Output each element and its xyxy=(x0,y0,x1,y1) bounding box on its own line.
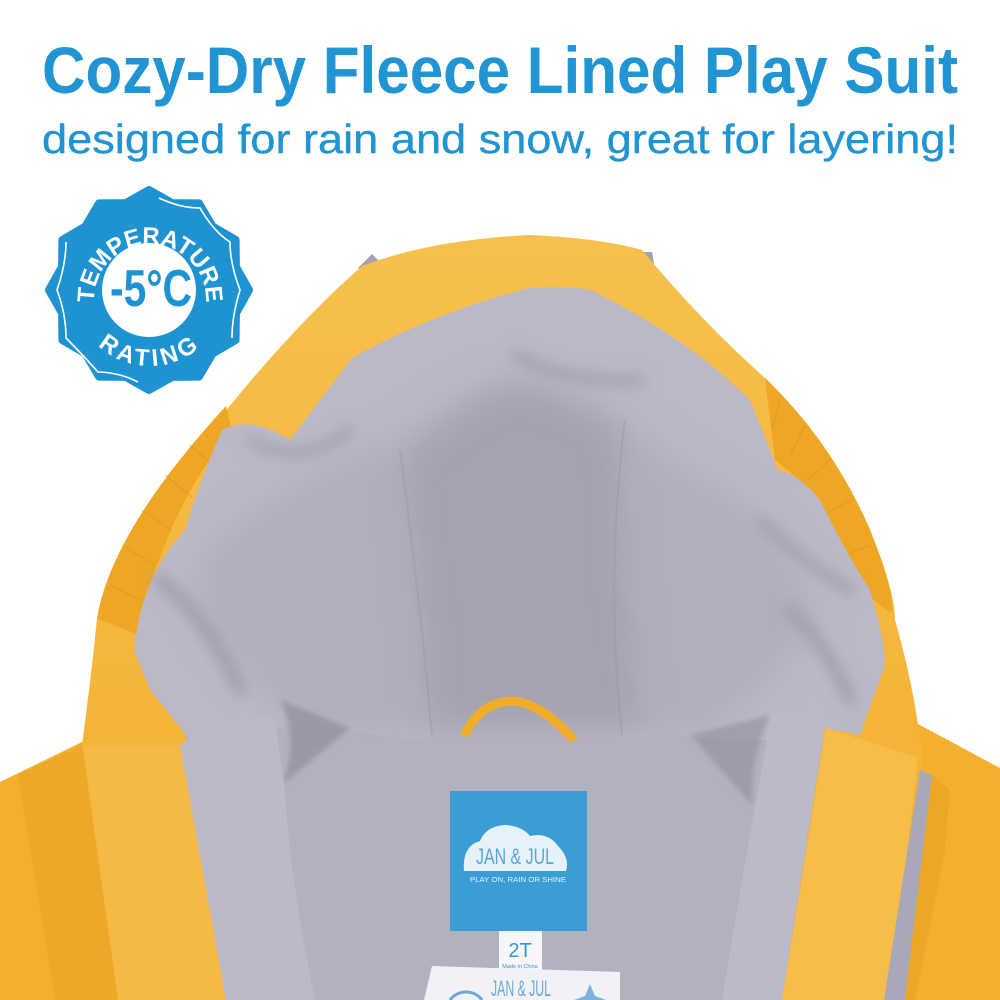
right collar fleece xyxy=(722,712,825,1000)
back seam lines xyxy=(400,420,625,735)
badge: temperature rating xyxy=(45,186,253,394)
hood elastic right xyxy=(765,378,892,614)
fleece interior shadow xyxy=(405,385,640,725)
star icon xyxy=(574,984,606,1000)
woven label xyxy=(450,791,587,931)
fleece mid tone xyxy=(200,380,815,735)
logo cloud xyxy=(464,825,567,871)
grey hood tabs xyxy=(358,252,654,272)
right shoulder edge xyxy=(905,775,950,1000)
size tag xyxy=(499,931,542,972)
jacket shoulders xyxy=(0,724,1000,1000)
origin: Made in China xyxy=(502,964,539,970)
fleece base under neck xyxy=(180,700,860,1000)
badge value: -5°C xyxy=(110,260,192,318)
hanger loop xyxy=(464,701,574,740)
hood elastic left xyxy=(97,406,232,634)
badge text bottom: RATING xyxy=(99,333,196,366)
logo text: JAN & JUL xyxy=(476,844,554,869)
right front flap xyxy=(782,728,918,1000)
zipper xyxy=(884,770,932,1000)
fleece lining outer xyxy=(134,287,885,740)
neck dark shadow right xyxy=(690,715,770,805)
rainbow icon xyxy=(450,992,482,1000)
inner body fleece xyxy=(285,735,760,1000)
logo tagline: PLAY ON, RAIN OR SHINE xyxy=(470,875,566,884)
care label xyxy=(424,966,620,1000)
left front flap xyxy=(83,745,226,1000)
size: 2T xyxy=(508,940,532,962)
fleece fold shadows xyxy=(160,355,850,700)
subtitle: designed for rain and snow, great for layering! xyxy=(42,116,958,162)
badge text top: TEMPERATURE xyxy=(77,227,223,302)
hood outer shell xyxy=(82,235,922,1000)
neck dark shadow left xyxy=(280,700,350,785)
left collar fleece xyxy=(180,718,315,1000)
